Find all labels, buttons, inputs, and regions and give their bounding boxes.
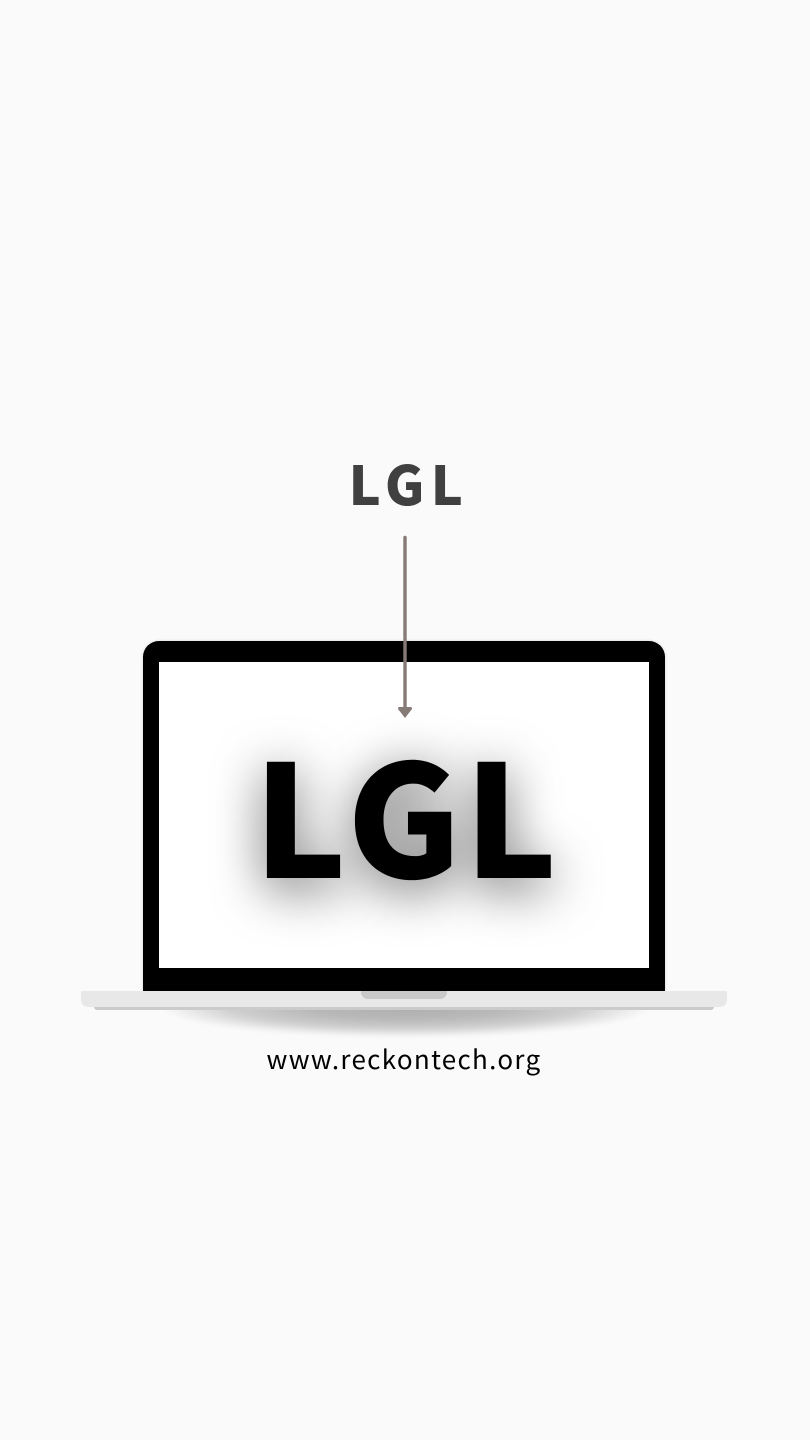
heading: LGL: LGL (349, 442, 469, 521)
screen logo: LGL: LGL (254, 697, 563, 923)
website url: www.reckontech.org (267, 1040, 541, 1077)
base underside (94, 1007, 714, 1010)
screen bezel (143, 641, 665, 991)
laptop drop shadow (176, 1010, 636, 1036)
screen display (159, 662, 649, 968)
base notch (361, 991, 447, 999)
laptop base (81, 991, 727, 1007)
laptop illustration (81, 640, 727, 1036)
arrow pointing to screen (398, 536, 412, 718)
